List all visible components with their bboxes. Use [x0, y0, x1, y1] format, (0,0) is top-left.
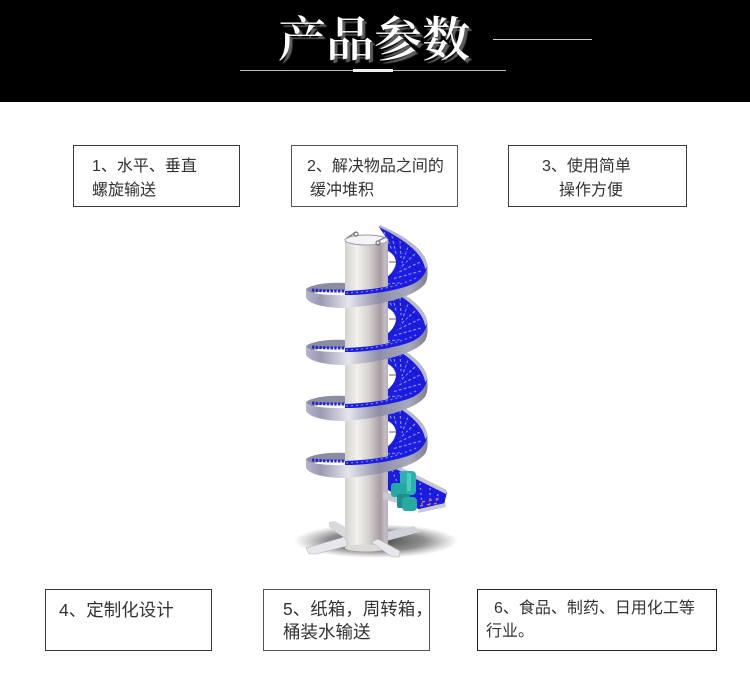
feature box 6	[477, 589, 717, 651]
header band	[0, 0, 750, 102]
feature box 5	[263, 589, 430, 651]
inclined infeed conveyor	[388, 463, 447, 513]
feature box 1	[73, 145, 240, 207]
feature 6 text	[486, 599, 695, 640]
feature 3 text: 操作方便	[559, 182, 623, 198]
central column	[345, 232, 388, 552]
feature 3 text: 3、使用简单	[542, 158, 631, 175]
rear base feet	[329, 521, 420, 541]
feature 1 text	[92, 157, 197, 198]
feature box 4	[45, 589, 212, 651]
feature 2 text	[307, 157, 444, 198]
feature 6 text: 行业。	[486, 622, 534, 640]
title rule accent	[353, 69, 393, 72]
spiral front sections	[306, 267, 428, 478]
feature 1 text: 1、水平、垂直	[92, 158, 197, 175]
feature 5 text	[283, 599, 433, 642]
title: 产品参数	[278, 14, 470, 67]
front base feet	[306, 537, 400, 557]
feature box 3	[508, 145, 687, 207]
feature 5 text: 桶装水输送	[283, 622, 370, 642]
feature box 2	[291, 145, 458, 207]
feature 2 text: 缓冲堆积	[310, 182, 374, 198]
feature 6 text: 6、食品、制药、日用化工等	[494, 600, 695, 617]
floor shadow	[294, 524, 458, 558]
spiral back sections	[306, 225, 428, 464]
title rule bottom	[240, 70, 506, 71]
feature 5 text: 5、纸箱，周转箱，	[283, 599, 433, 619]
feature 3 text	[542, 157, 631, 198]
feature 4 text: 4、定制化设计	[59, 600, 174, 620]
feature 1 text: 螺旋输送	[92, 182, 156, 198]
title rule right	[493, 39, 592, 40]
feature 2 text: 2、解决物品之间的	[307, 158, 444, 175]
drive motor	[383, 471, 417, 511]
